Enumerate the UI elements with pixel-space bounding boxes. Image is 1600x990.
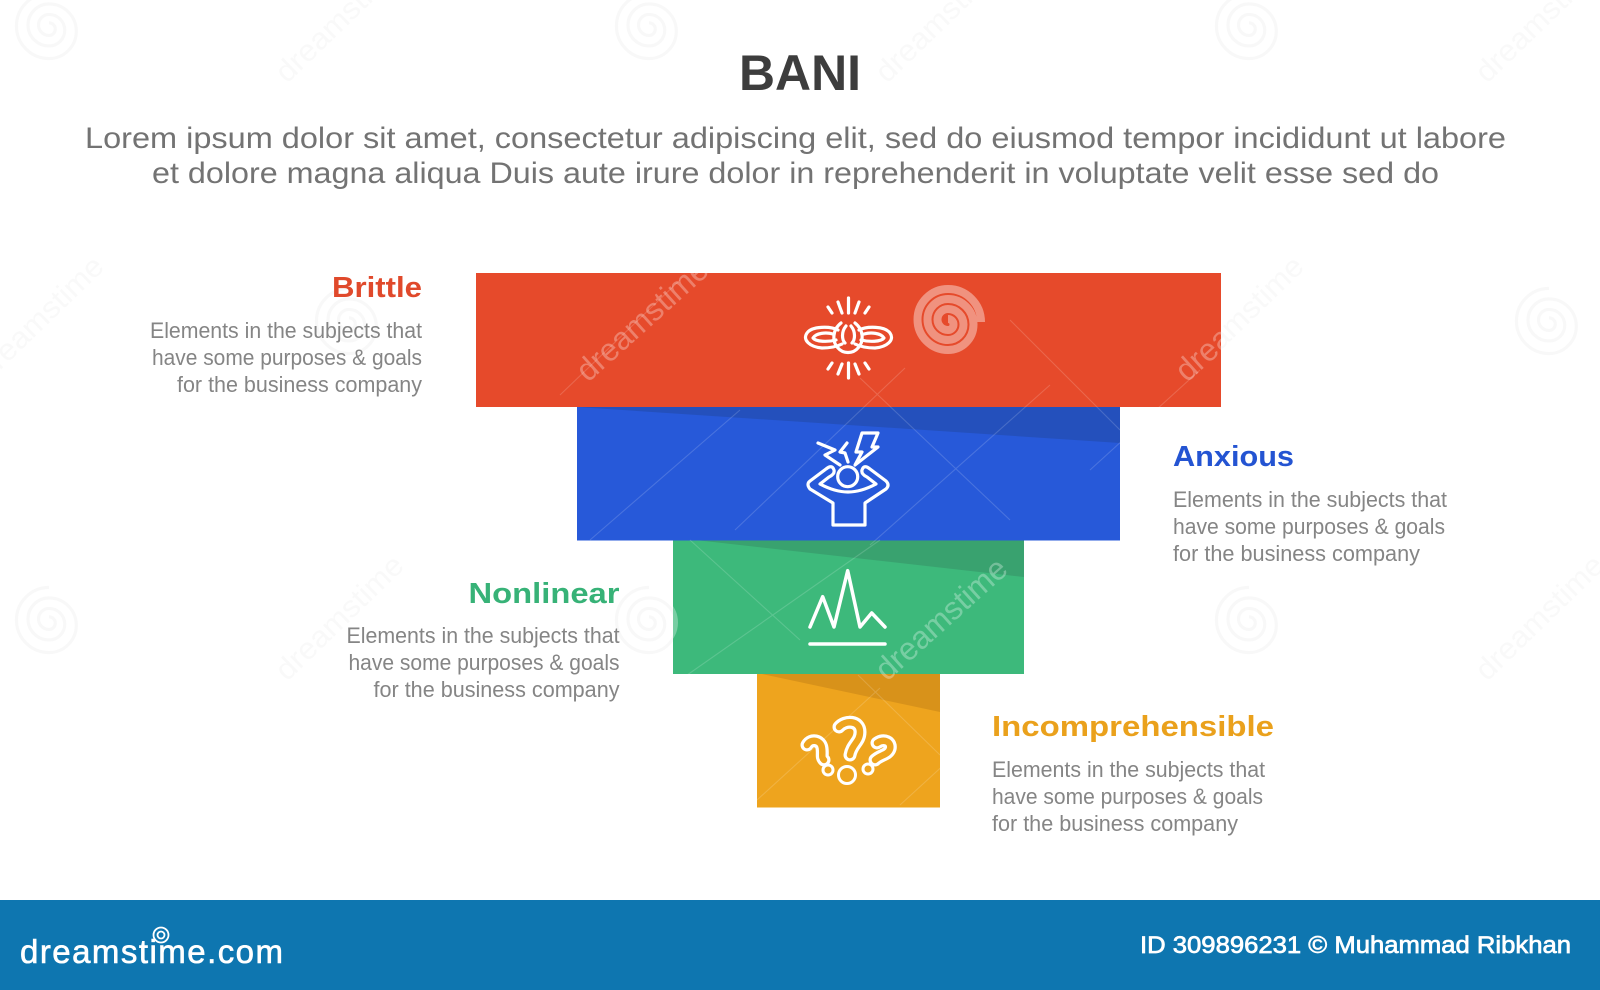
subtitle: Lorem ipsum dolor sit amet, consectetur adipiscing elit, sed do eiusmod tempor incididunt ut labore [85,122,1506,155]
footer logo: dreamstime.com [20,933,283,970]
bar: Nonlinear [673,540,1024,674]
footer credit: ID 309896231 © Muhammad Ribkhan [1140,932,1571,959]
bar: Incomprehensible [757,674,940,808]
label: Incomprehensible: have some purposes & goals [992,784,1263,809]
icon: anxious person [808,433,888,525]
label: Incomprehensible: Elements in the subjects that [992,757,1265,782]
label: Nonlinear: for the business company [374,677,620,702]
label: Anxious [1173,441,1447,566]
funnel chart [476,273,1221,808]
label: Brittle [150,272,422,397]
watermark pattern on white: dreamstime [269,549,411,687]
subtitle [85,122,1506,190]
label: Nonlinear: have some purposes & goals [348,650,620,675]
label: Brittle: have some purposes & goals [152,345,422,370]
bar: Brittle [476,273,1221,407]
label: Nonlinear: Elements in the subjects that [346,623,620,648]
footer bar [0,900,1600,990]
subtitle: et dolore magna aliqua Duis aute irure dolor in reprehenderit in voluptate velit esse sed do [152,157,1439,190]
label: Nonlinear [346,578,620,702]
icon: question marks [807,722,890,784]
label: Incomprehensible: for the business company [992,811,1238,836]
label: Anxious: have some purposes & goals [1173,514,1445,539]
label: Anxious: Anxious [1173,441,1294,473]
label: Anxious: Elements in the subjects that [1173,487,1447,512]
bar: Anxious [577,407,1120,540]
label: Incomprehensible [992,711,1274,836]
watermark overlay on bars: dreamstime [1168,251,1314,388]
watermark pattern on white [0,0,1600,687]
label: Anxious: for the business company [1173,541,1420,566]
icon: nonlinear chart [810,571,885,644]
label: Brittle: Elements in the subjects that [150,318,422,343]
label: Nonlinear: Nonlinear [468,578,620,610]
label: Brittle: for the business company [177,372,422,397]
icon: broken chain [805,298,892,378]
label: Incomprehensible: Incomprehensible [992,711,1274,743]
label: Brittle: Brittle [332,272,422,304]
watermark overlay on bars: dreamstime [868,550,1014,687]
watermark overlay on bars: dreamstime [569,251,715,388]
watermark overlay on bars [560,273,1221,806]
title: BANI [739,45,861,101]
watermark pattern on white: dreamstime [1169,250,1311,388]
